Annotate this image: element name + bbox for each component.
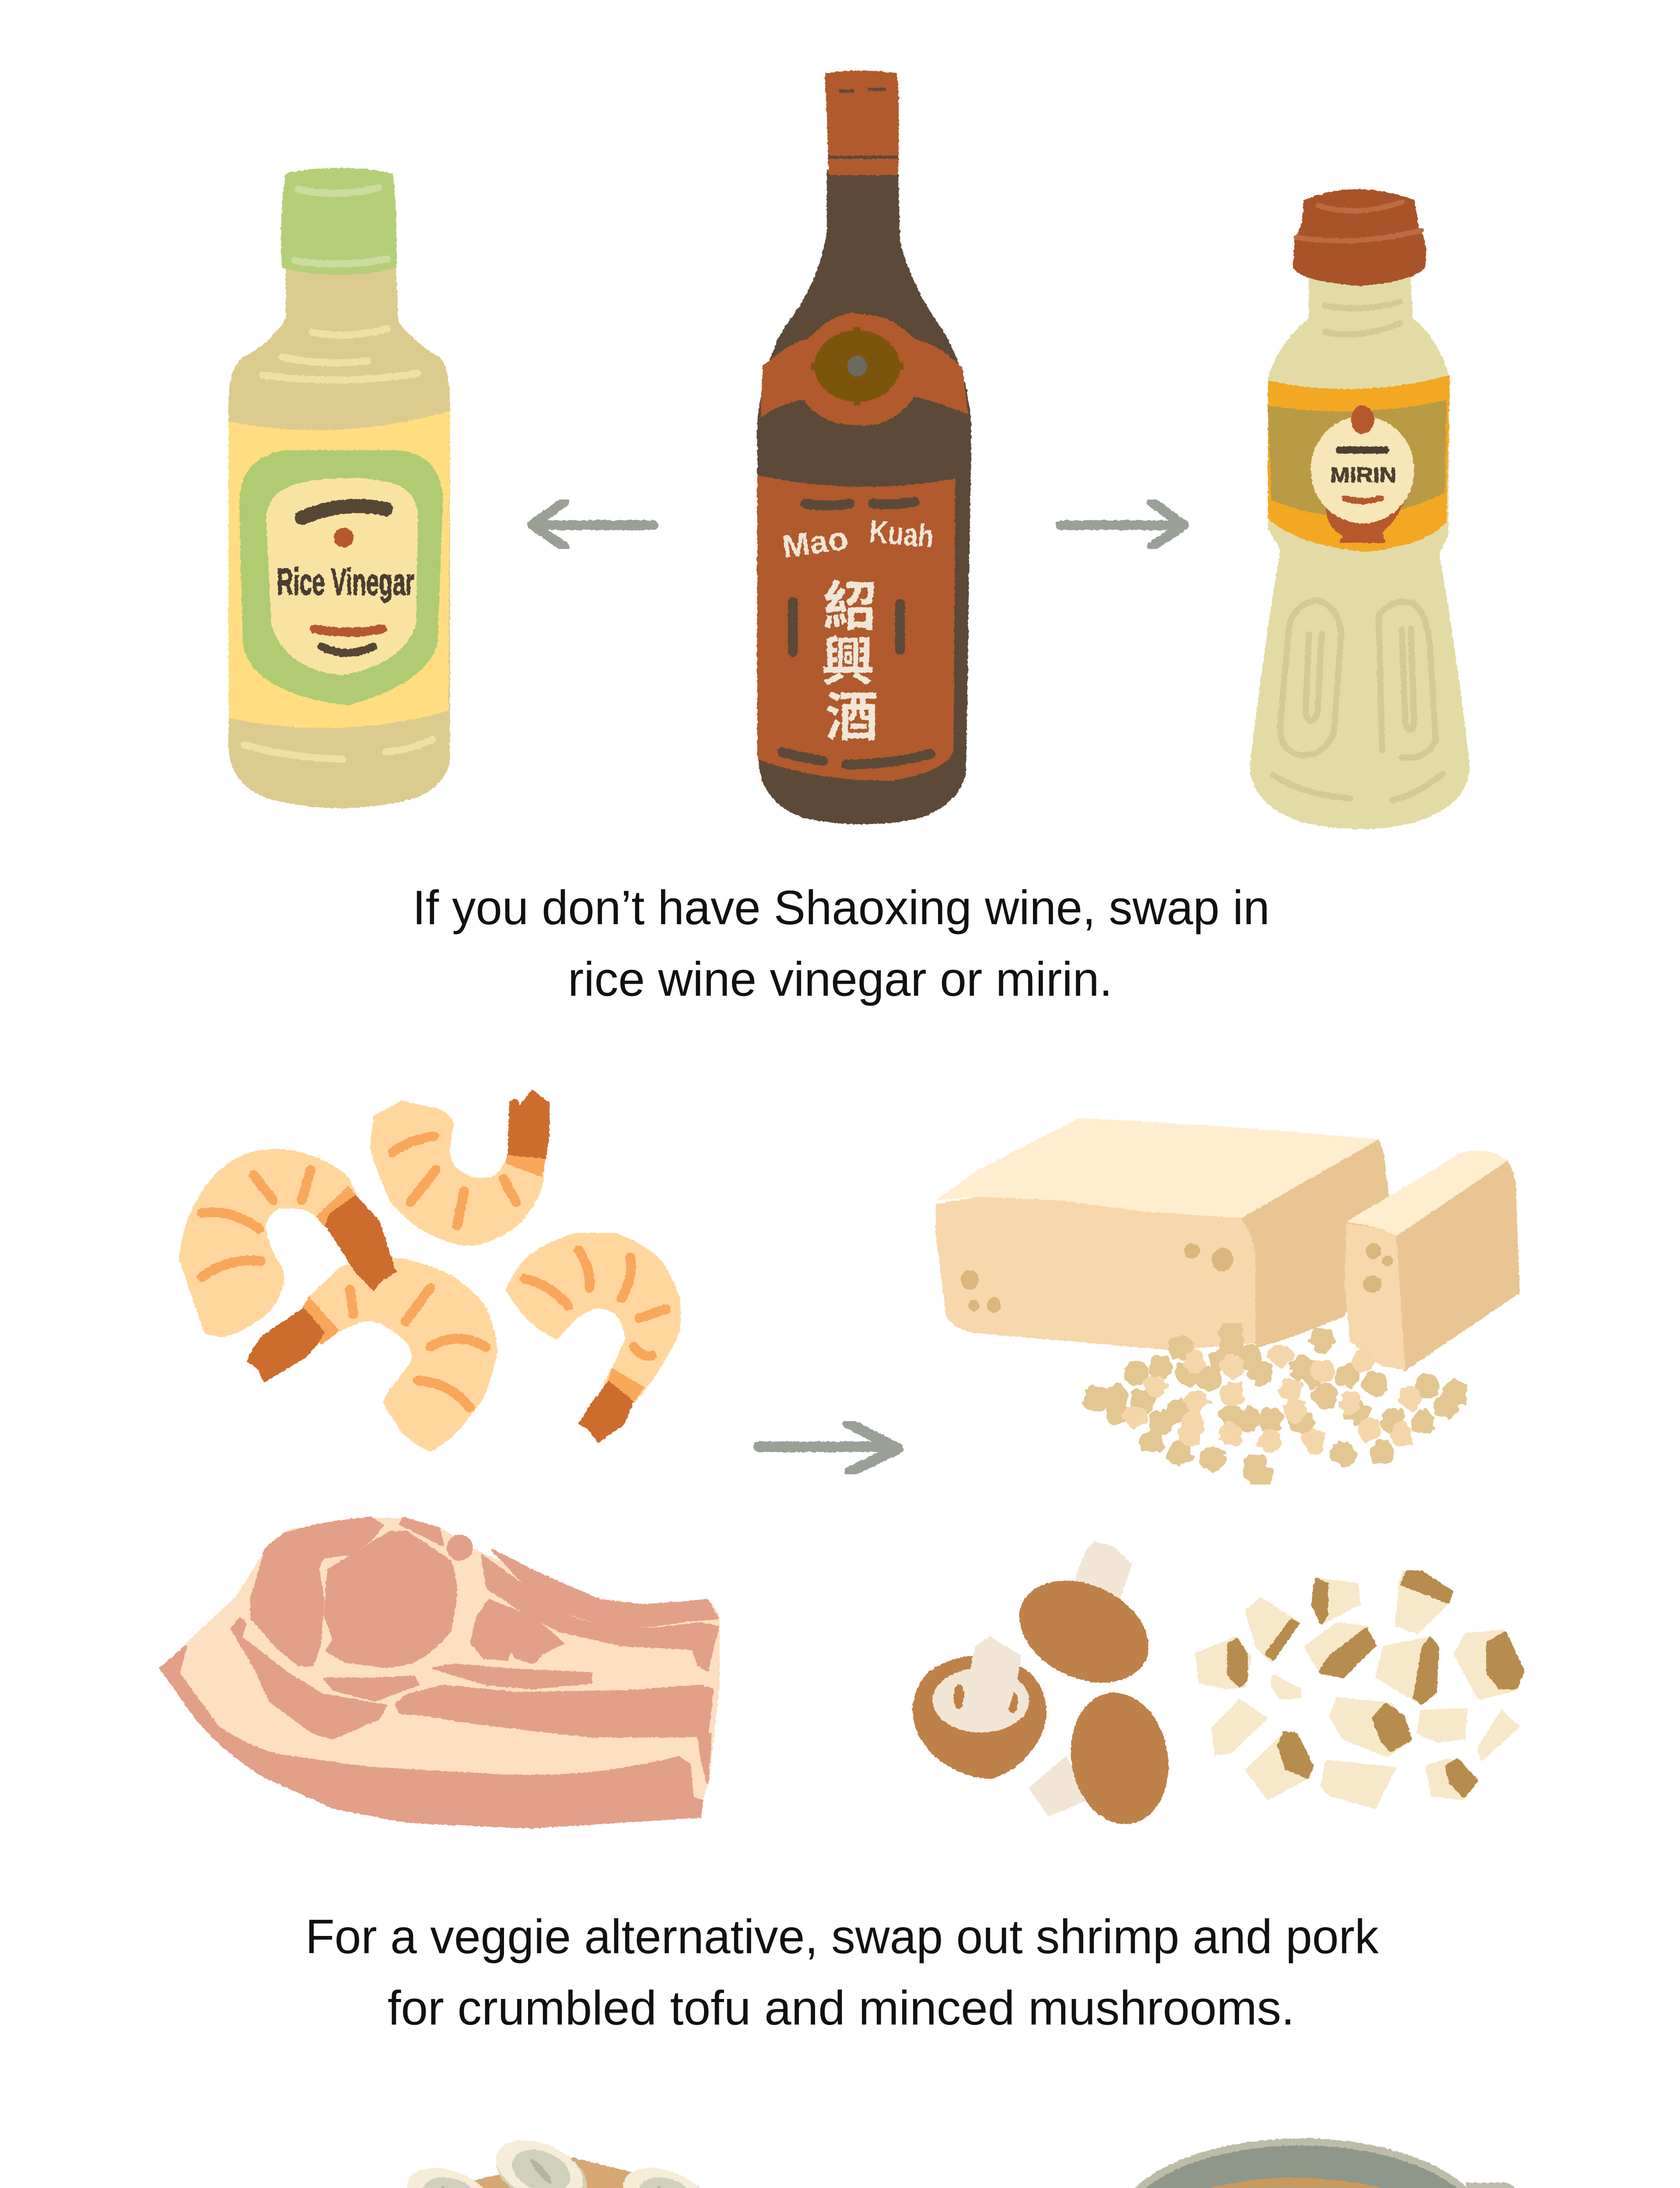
icon: Shaoxing wine bottle (757, 70, 971, 824)
wonton dumplings (396, 2128, 833, 2188)
panel: wonton tip (180, 2128, 952, 2188)
icon: tofu blocks and crumbles (936, 1118, 1519, 1477)
icon: cutting board with wontons (340, 2128, 929, 2188)
text: wine substitution tip: If you don’t have Shaoxing wine, swap in (413, 881, 1270, 935)
arrow: swap ingredients (759, 1424, 898, 1472)
panel: wine substitutes (228, 70, 1470, 1006)
text: veggie alternative tip: for crumbled tofu and minced mushrooms. (388, 1981, 1295, 2035)
label text: Shaoxing characters: 酒 (825, 687, 878, 747)
panel: vegetarian swap (161, 1091, 1523, 2035)
label text: Shaoxing characters (822, 577, 878, 747)
label text: Shaoxing characters: 紹 (823, 577, 877, 637)
text: veggie alternative tip: For a veggie alternative, swap out shrimp and pork (305, 1910, 1379, 1964)
label text: mirin: MIRIN (1330, 463, 1396, 487)
text: wine substitution tip (413, 881, 1270, 1006)
panel: stock tip (1057, 2142, 1534, 2188)
label text: brand romanization: Mao (780, 520, 850, 565)
icon: rice vinegar bottle (228, 168, 450, 808)
label text: brand name: Kuah (868, 513, 935, 554)
icon: mirin bottle (1250, 189, 1470, 829)
label text: rice vinegar: Rice Vinegar (277, 561, 414, 603)
arrow: to mirin (1060, 502, 1184, 547)
label text: Shaoxing characters: 興 (822, 632, 875, 692)
text: veggie alternative tip (305, 1910, 1379, 2035)
icon: chopped mushrooms (1197, 1572, 1523, 1808)
text: wine substitution tip: rice wine vinegar or mirin. (568, 953, 1113, 1006)
arrow: to rice vinegar (532, 502, 654, 547)
icon: pork belly (161, 1518, 720, 1827)
icon: pot of stock (1057, 2142, 1534, 2188)
icon: whole mushrooms (913, 1541, 1179, 1832)
icon: shrimp group (180, 1091, 679, 1450)
